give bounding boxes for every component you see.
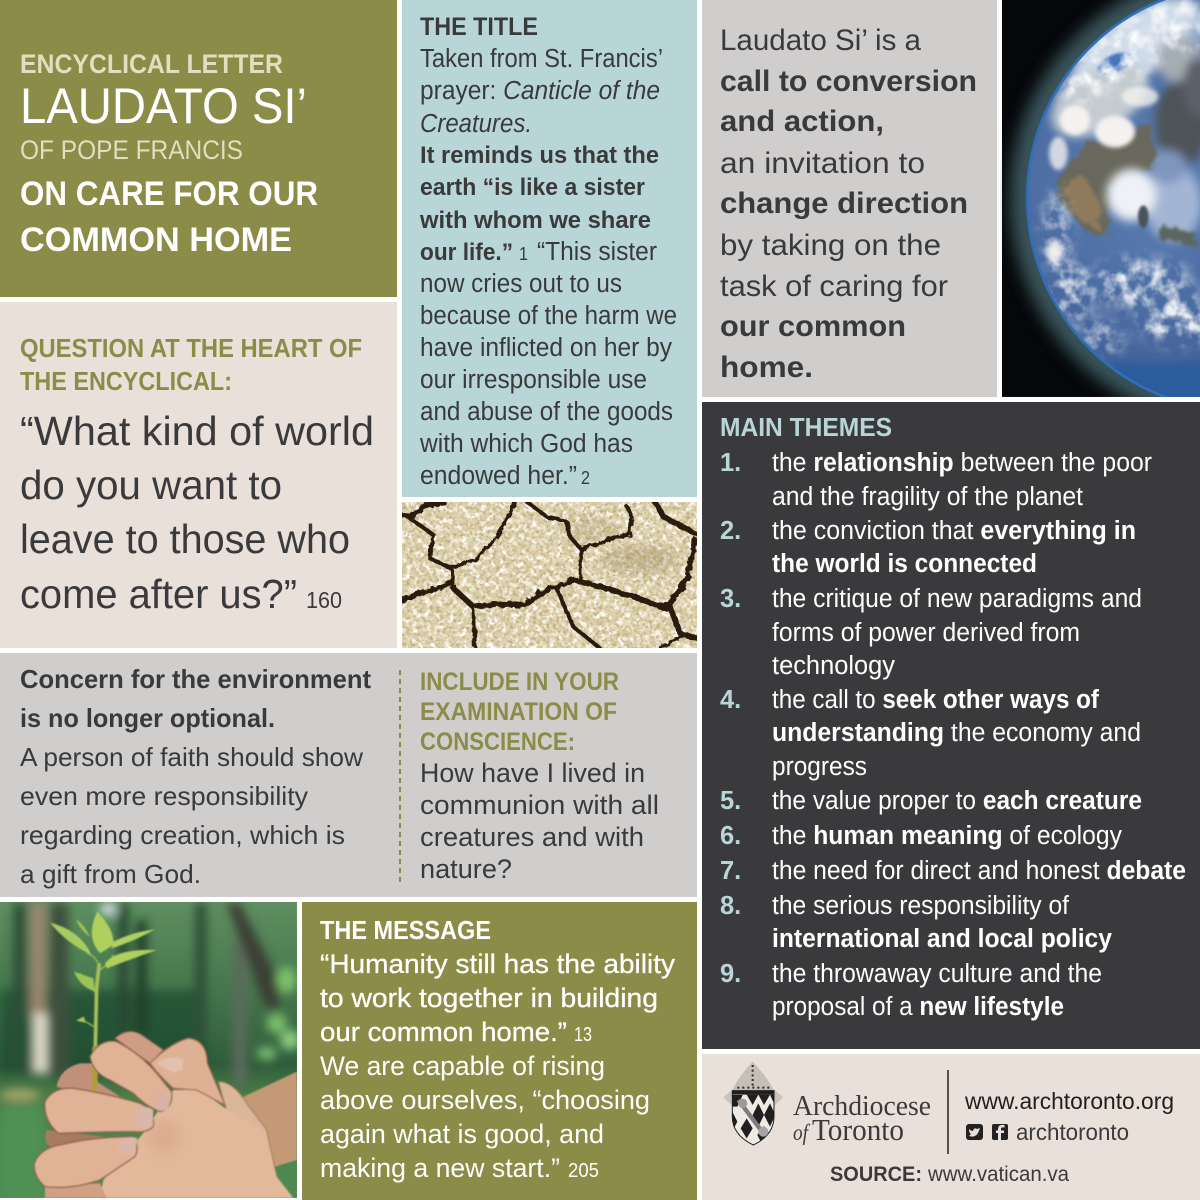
theme 8: the serious responsibility of bbox=[772, 892, 1070, 920]
finger upper bbox=[90, 1041, 172, 1112]
theme 7: the need for direct and honest debate bbox=[772, 857, 1186, 885]
theme 3 bbox=[720, 585, 1142, 680]
text: conscience question: How have I lived in bbox=[420, 758, 645, 788]
theme 3: 3. bbox=[720, 585, 741, 613]
heading: examination of conscience: EXAMINATION OF bbox=[420, 698, 617, 726]
theme 1 bbox=[720, 449, 1152, 511]
text: title explanation: with whom we share bbox=[419, 207, 651, 234]
text: humanity quote: making a new start.” bbox=[320, 1153, 560, 1183]
seedling bbox=[50, 912, 157, 1047]
quote: what kind of world: come after us?” bbox=[20, 571, 297, 617]
theme 4: the call to seek other ways of bbox=[772, 686, 1099, 714]
text: call to conversion and action: change direction bbox=[720, 187, 968, 220]
photo: cracked dry earth bbox=[400, 502, 697, 648]
text: title explanation: have inflicted on her by bbox=[420, 334, 672, 362]
text: concern for the environment: Concern for the environment bbox=[20, 664, 371, 694]
text: conscience question: nature? bbox=[420, 854, 512, 884]
theme 5: the value proper to each creature bbox=[772, 787, 1142, 815]
photo: planet earth bbox=[1002, 0, 1200, 428]
text: title explanation: our life.” bbox=[420, 239, 513, 266]
text: humanity quote: above ourselves, “choosing bbox=[320, 1085, 650, 1115]
theme 6: 6. bbox=[720, 822, 741, 850]
text: title explanation: Taken from St. Francis’ bbox=[420, 45, 663, 73]
icon: archdiocese crest bbox=[723, 1062, 783, 1145]
text: humanity quote: We are capable of rising bbox=[320, 1051, 605, 1081]
text: humanity quote: 13 bbox=[574, 1024, 592, 1046]
text: source: SOURCE: bbox=[830, 1162, 922, 1186]
text: social handle: archtoronto bbox=[1016, 1119, 1129, 1145]
heading: the title: THE TITLE bbox=[420, 13, 538, 41]
subheading: of Pope Francis: OF POPE FRANCIS bbox=[20, 135, 243, 165]
theme 3: the critique of new paradigms and bbox=[772, 585, 1142, 613]
text: title explanation: because of the harm we bbox=[420, 302, 677, 330]
theme 5: 5. bbox=[720, 787, 741, 815]
theme 4 bbox=[720, 686, 1141, 781]
heading: question: QUESTION AT THE HEART OF bbox=[20, 333, 362, 363]
text: concern for the environment: regarding creation, which is bbox=[20, 820, 345, 850]
theme 1: 1. bbox=[720, 449, 741, 477]
thumb D bbox=[115, 1032, 163, 1063]
text: title explanation: with which God has bbox=[419, 430, 633, 458]
list: numbered themes bbox=[720, 449, 1186, 1021]
text: humanity quote: to work together in building bbox=[320, 983, 658, 1013]
theme 8: 8. bbox=[720, 892, 741, 920]
subtitle: on care for our common home: ON CARE FOR OUR bbox=[20, 175, 318, 213]
back of hand bbox=[100, 1090, 293, 1198]
text: call to conversion and action: home. bbox=[720, 351, 813, 384]
lower back bbox=[45, 1183, 107, 1198]
text: title explanation: prayer: Canticle of the bbox=[420, 77, 660, 105]
quote: what kind of world: do you want to bbox=[20, 462, 282, 508]
text: call to conversion and action: Laudato Si’ is a bbox=[720, 24, 921, 57]
theme 9: 9. bbox=[720, 960, 741, 988]
photo: clasped hands holding seedling bbox=[0, 902, 300, 1200]
heading: encyclical letter: ENCYCLICAL LETTER bbox=[20, 49, 283, 79]
heading: main themes: MAIN THEMES bbox=[720, 414, 892, 442]
text: call to conversion and action: an invitation to bbox=[720, 147, 925, 180]
icon: twitter bbox=[966, 1124, 983, 1140]
theme 7: 7. bbox=[720, 857, 741, 885]
text: concern for the environment bbox=[20, 664, 371, 889]
quote: what kind of world: “What kind of world bbox=[20, 408, 374, 454]
text: title explanation: earth “is like a sister bbox=[420, 174, 645, 201]
theme 4: 4. bbox=[720, 686, 741, 714]
text: call to conversion and action: task of caring for bbox=[720, 270, 948, 303]
text: conscience question bbox=[420, 758, 659, 884]
text: humanity quote: “Humanity still has the ability bbox=[320, 949, 676, 979]
lower palm shade and stem base bbox=[57, 1063, 120, 1100]
text: call to conversion and action: by taking on the bbox=[720, 229, 941, 262]
theme 3: forms of power derived from bbox=[772, 619, 1080, 647]
theme 9: proposal of a new lifestyle bbox=[772, 993, 1064, 1021]
heading: examination of conscience: CONSCIENCE: bbox=[420, 728, 575, 756]
heading: question: THE ENCYCLICAL: bbox=[20, 366, 232, 396]
panel: the title bbox=[402, 0, 697, 497]
text: concern for the environment: A person of faith should show bbox=[20, 742, 363, 772]
text: title explanation: now cries out to us bbox=[420, 270, 622, 298]
theme 8 bbox=[720, 892, 1113, 953]
finger middle bbox=[45, 1088, 153, 1133]
text: call to conversion and action: and action, bbox=[720, 105, 884, 138]
heading: examination of conscience: INCLUDE IN YOUR bbox=[420, 668, 619, 696]
finger under bbox=[45, 1130, 103, 1148]
panel: main themes bbox=[702, 402, 1200, 1049]
theme 1: and the fragility of the planet bbox=[772, 483, 1083, 511]
logo text: Archdiocese of Toronto: Archdiocese bbox=[793, 1090, 931, 1122]
theme 9 bbox=[720, 960, 1102, 1021]
text: title explanation: Creatures. bbox=[420, 110, 532, 138]
theme 6: the human meaning of ecology bbox=[772, 822, 1122, 850]
theme 2: the conviction that everything in bbox=[772, 517, 1136, 545]
text: title explanation: and abuse of the goods bbox=[420, 398, 673, 426]
theme 2: 2. bbox=[720, 517, 741, 545]
finger lower bbox=[34, 1137, 137, 1187]
heading: examination of conscience bbox=[420, 668, 619, 756]
heading: Laudato Si': LAUDATO SI’ bbox=[20, 78, 307, 134]
subtitle: on care for our common home bbox=[20, 175, 318, 259]
icon: facebook bbox=[992, 1124, 1008, 1140]
quote: what kind of world bbox=[20, 408, 374, 617]
panel: question at the heart bbox=[0, 302, 397, 648]
text: title explanation: endowed her.” bbox=[420, 462, 577, 490]
theme 4: understanding the economy and bbox=[772, 719, 1141, 747]
quote: what kind of world: 160 bbox=[306, 587, 342, 613]
text: source bbox=[830, 1162, 1069, 1186]
heading: the message: THE MESSAGE bbox=[320, 917, 491, 945]
theme 2: the world is connected bbox=[772, 550, 1037, 578]
theme 9: the throwaway culture and the bbox=[772, 960, 1102, 988]
panel: footer bbox=[702, 1054, 1200, 1200]
text: title explanation: our irresponsible use bbox=[420, 366, 647, 394]
subtitle: on care for our common home: COMMON HOME bbox=[20, 221, 292, 259]
text: title explanation: 1 bbox=[519, 244, 528, 264]
theme 4: progress bbox=[772, 753, 867, 781]
theme 2 bbox=[720, 517, 1136, 578]
heading: question bbox=[20, 333, 362, 396]
finger E bbox=[150, 1038, 225, 1105]
text: humanity quote: 205 bbox=[568, 1160, 599, 1182]
text: title explanation: “This sister bbox=[537, 238, 657, 266]
text: concern for the environment: a gift from God. bbox=[20, 859, 201, 889]
text: concern for the environment: is no longer optional. bbox=[20, 703, 275, 733]
text: humanity quote: again what is good, and bbox=[320, 1119, 604, 1149]
text: website: www.archtoronto.org bbox=[964, 1088, 1174, 1114]
text: title explanation bbox=[419, 45, 677, 490]
quote: what kind of world: leave to those who bbox=[20, 516, 350, 562]
panel: the message bbox=[302, 902, 697, 1200]
text: conscience question: communion with all bbox=[420, 790, 659, 820]
panel: title block bbox=[0, 0, 397, 297]
logo text: Archdiocese of Toronto bbox=[793, 1090, 931, 1147]
theme 3: technology bbox=[772, 652, 895, 680]
text: title explanation: It reminds us that the bbox=[420, 142, 659, 169]
panel: concern and conscience bbox=[0, 653, 697, 897]
theme 1: the relationship between the poor bbox=[772, 449, 1152, 477]
text: concern for the environment: even more responsibility bbox=[20, 781, 308, 811]
panel: call to conversion bbox=[702, 0, 997, 397]
text: call to conversion and action: our common bbox=[720, 310, 906, 343]
text: humanity quote: our common home.” bbox=[320, 1017, 567, 1047]
text: conscience question: creatures and with bbox=[420, 822, 644, 852]
arm bbox=[240, 1072, 297, 1167]
text: source: www.vatican.va bbox=[927, 1162, 1069, 1186]
logo text: Archdiocese of Toronto: of bbox=[793, 1120, 811, 1145]
logo text: Archdiocese of Toronto: Toronto bbox=[812, 1112, 904, 1147]
text: humanity quote bbox=[320, 949, 676, 1183]
back hand finger bbox=[218, 1082, 277, 1177]
text: call to conversion and action bbox=[720, 24, 977, 384]
text: call to conversion and action: call to conversion bbox=[720, 65, 977, 98]
theme 8: international and local policy bbox=[772, 925, 1113, 953]
text: title explanation: 2 bbox=[581, 468, 590, 488]
